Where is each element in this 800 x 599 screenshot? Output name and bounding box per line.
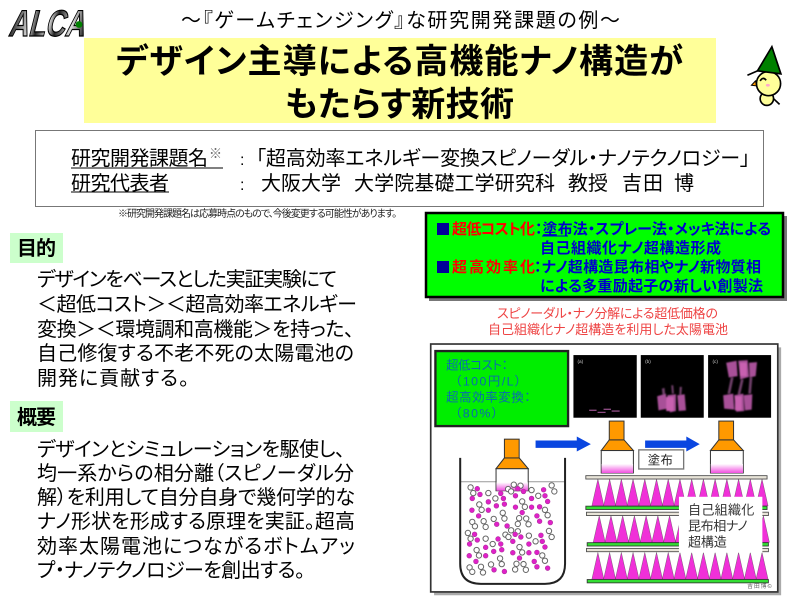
- text block: overview: 均一系からの相分離（スピノーダル分: [37, 462, 354, 485]
- heading: 目的: 目的: [17, 237, 56, 260]
- text block: overview: ナノ形状を形成する原理を実証。超高: [37, 510, 355, 533]
- title banner: デザイン主導による高機能ナノ構造が: [116, 42, 683, 81]
- title banner: [84, 38, 716, 124]
- bottle 3: [710, 421, 743, 473]
- project info box: 博: [674, 172, 694, 195]
- label: self-organized nanostructure: 超構造: [688, 535, 727, 550]
- project info box: :: [240, 152, 244, 169]
- project info box: 研究代表者: [71, 172, 169, 195]
- subtitle: ～『ゲームチェンジング』な研究開発課題の例～: [181, 9, 620, 32]
- label: 塗布: [639, 450, 684, 469]
- heading: 概要: [10, 401, 63, 432]
- callout: targets: （100円/L）: [455, 375, 521, 389]
- particles: [465, 482, 557, 575]
- image: microscope b: (b): [645, 359, 651, 364]
- heading: 目的: [10, 233, 63, 263]
- label: 塗布: 塗布: [648, 454, 673, 468]
- text block: overview: デザインとシミュレーションを駆使し、: [37, 438, 345, 461]
- layered nanostructure: [586, 476, 769, 583]
- project info box: 大学院基礎工学研究科: [354, 172, 555, 195]
- text block: purpose: ＜超低コスト＞＜超高効率エネルギー: [37, 293, 357, 316]
- image: microscope b: [641, 355, 704, 418]
- arrow 1: [536, 436, 591, 452]
- image: microscope c: [708, 355, 771, 418]
- credit: 吉田博©: [747, 582, 773, 590]
- panel: key points: [426, 213, 787, 301]
- caption: solar cell: [488, 306, 728, 337]
- panel: key points: ：ナノ超構造昆布相やナノ新物質相: [534, 258, 761, 276]
- text block: overview: 解）を利用して自分自身で幾何学的な: [37, 486, 355, 509]
- callout: targets: （80%）: [455, 407, 498, 421]
- project info box: 研究開発課題名: [71, 147, 208, 170]
- beaker: [460, 458, 565, 584]
- label: self-organized nanostructure: 自己組織化: [688, 503, 754, 518]
- panel: solar cell diagram: [431, 344, 781, 595]
- callout: targets: 超高効率変換：: [446, 390, 531, 405]
- project info box: 教授: [568, 172, 608, 195]
- text block: purpose: [37, 268, 357, 390]
- image: microscope c: (c): [712, 359, 718, 364]
- text block: purpose: 変換＞＜環境調和高機能＞を持った、: [37, 318, 354, 341]
- text block: purpose: デザインをベースとした実証実験にて: [37, 268, 337, 291]
- text block: overview: プ・ナノテクノロジーを創出する。: [37, 559, 305, 582]
- label: self-organized nanostructure: [679, 497, 762, 553]
- text block: overview: [37, 438, 355, 582]
- heading: 概要: 概要: [17, 406, 56, 429]
- text block: purpose: 開発に貢献する。: [37, 367, 189, 390]
- project info box: :: [240, 177, 244, 194]
- footnote: ※研究開発課題名は応募時点のもので、今後変更する可能性があります。: [118, 207, 397, 220]
- callout: targets: 超低コスト：: [446, 357, 508, 372]
- callout: targets: [435, 351, 568, 426]
- panel: key points: 超低コスト化: [452, 220, 535, 238]
- caption: solar cell: 自己組織化ナノ超構造を利用した太陽電池: [488, 322, 728, 337]
- bottle 2: [601, 421, 633, 473]
- project info box: 吉田: [622, 172, 663, 195]
- label: self-organized nanostructure: 昆布相ナノ: [688, 519, 748, 534]
- project info box: 「超高効率エネルギー変換スピノーダル・ナノテクノロジー」: [256, 147, 750, 170]
- arrow 2: [645, 436, 700, 452]
- panel: key points: 超高効率化: [452, 258, 535, 276]
- logo: ALCA: ALCA: [6, 3, 92, 44]
- text block: overview: 効率太陽電池につながるボトムアッ: [37, 535, 355, 558]
- panel: key points: 自己組織化ナノ超構造形成: [540, 239, 721, 257]
- project info box: [36, 130, 764, 206]
- caption: solar cell: スピノーダル・ナノ分解による超低価格の: [497, 306, 718, 321]
- project info box: ※: [209, 146, 222, 161]
- bottle in beaker: [496, 439, 528, 491]
- project info box: 大阪大学: [261, 172, 341, 195]
- title banner: もたらす新技術: [285, 86, 514, 124]
- panel: key points: による多重励起子の新しい創製法: [540, 277, 763, 295]
- text block: purpose: 自己修復する不老不死の太陽電池の: [37, 342, 354, 365]
- image: microscope a: [573, 355, 637, 418]
- panel: key points: ：塗布法・スプレー法・メッキ法による: [535, 220, 771, 238]
- icon: mascot: [747, 47, 781, 105]
- image: microscope a: (a): [577, 359, 584, 364]
